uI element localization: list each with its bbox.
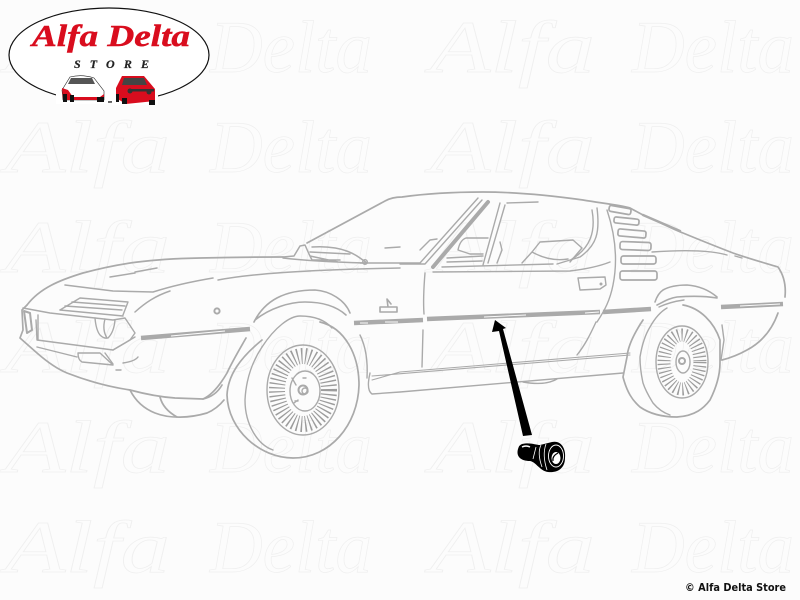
side moulding strips <box>141 304 783 338</box>
watermark pattern: Delta <box>209 107 372 189</box>
wiper and cowl details <box>283 245 367 263</box>
watermark pattern: Alfa <box>0 307 170 389</box>
hood and front details <box>65 268 400 312</box>
watermark pattern: Alfa <box>423 307 595 389</box>
arrow pointing at trim <box>492 320 532 436</box>
watermark pattern: Alfa <box>0 207 170 289</box>
watermark pattern: Delta <box>631 7 794 89</box>
rear louvres <box>609 205 657 280</box>
watermark pattern: Alfa <box>423 507 595 589</box>
watermark pattern: Delta <box>631 207 794 289</box>
logo red car <box>112 73 158 105</box>
watermark pattern: Delta <box>631 507 794 589</box>
door handle <box>578 277 606 290</box>
rear deck lines <box>643 215 680 231</box>
side windows <box>360 198 482 264</box>
logo <box>9 8 209 105</box>
watermark pattern: Delta <box>209 7 372 89</box>
side badge <box>380 299 397 312</box>
icon: trim clip fastener <box>518 442 565 472</box>
watermark pattern: Delta <box>631 407 794 489</box>
door and side panels <box>422 273 425 367</box>
watermark pattern: Alfa <box>0 107 170 189</box>
watermark pattern: Alfa <box>0 7 170 89</box>
watermark pattern: Alfa <box>423 7 595 89</box>
front wheel arch <box>254 290 350 322</box>
rear wheel <box>623 305 724 417</box>
watermark pattern: Delta <box>209 207 372 289</box>
car body outline <box>20 192 785 417</box>
logo oval <box>9 8 209 102</box>
logo store text: STORE <box>74 57 149 71</box>
logo wordmark: Alfa Delta <box>30 18 190 53</box>
watermark pattern: Alfa <box>423 407 595 489</box>
watermark pattern: Alfa <box>0 507 170 589</box>
front wheel <box>227 322 359 458</box>
watermark pattern: Delta <box>209 507 372 589</box>
logo white car <box>56 73 108 104</box>
watermark pattern: Delta <box>631 307 794 389</box>
watermark pattern: Alfa <box>423 107 595 189</box>
watermark pattern: Alfa <box>0 407 170 489</box>
watermark pattern: Delta <box>209 407 372 489</box>
watermark pattern: Delta <box>631 107 794 189</box>
rear wheel arch <box>655 285 717 302</box>
side marker lamp <box>214 308 220 314</box>
watermark pattern: Delta <box>209 307 372 389</box>
copyright notice: © Alfa Delta Store <box>685 582 786 594</box>
watermark pattern: Alfa <box>423 207 595 289</box>
car line drawing <box>20 192 785 458</box>
